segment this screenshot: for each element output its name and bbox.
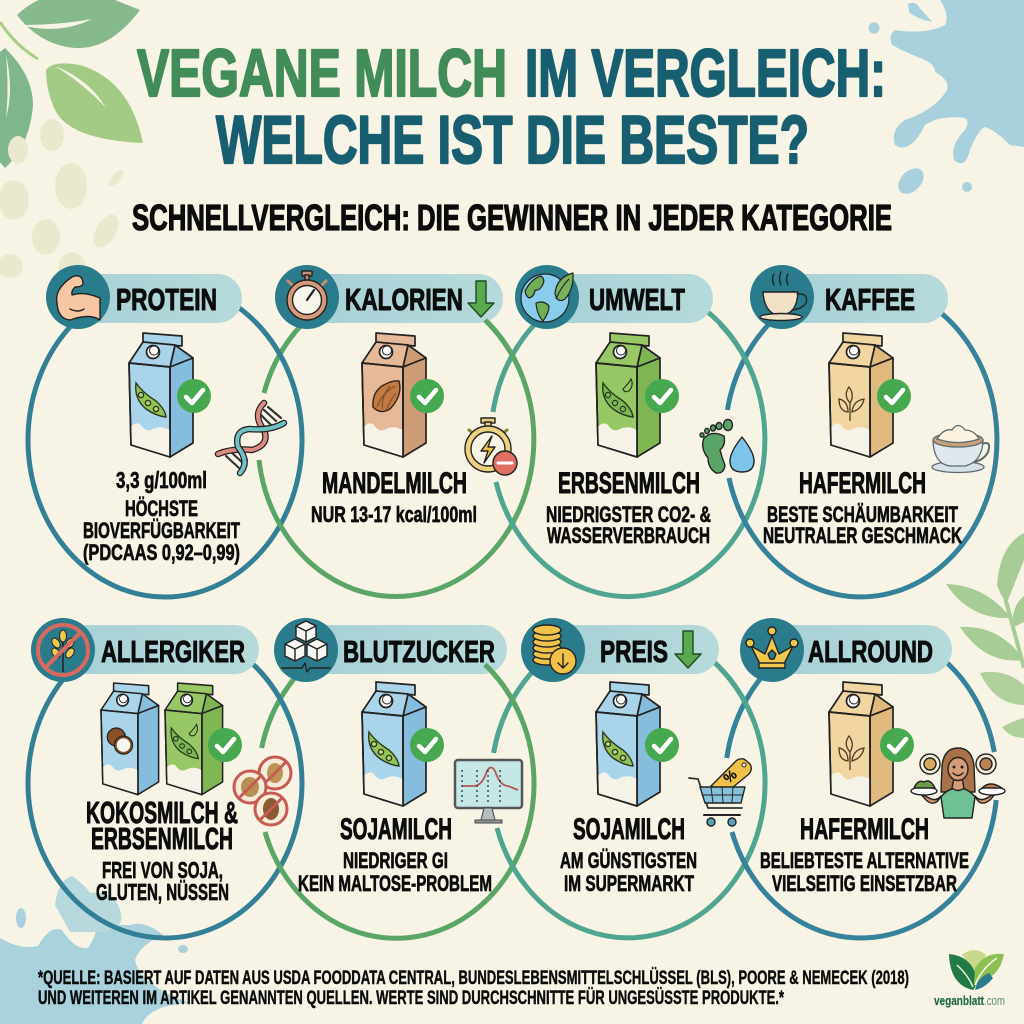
text: kalorien: NUR 13-17 kcal/100ml	[311, 502, 477, 527]
text: blutzucker: KEIN MALTOSE-PROBLEM	[298, 871, 492, 896]
text: protein: 3,3 g/100ml	[116, 467, 207, 493]
header pill: kalorien	[275, 265, 503, 329]
header pill: preis: PREIS	[600, 634, 668, 669]
check badge	[645, 728, 679, 762]
text: kaffee: HAFERMILCH	[799, 467, 926, 500]
header pill: protein	[46, 265, 242, 329]
panel: preis	[485, 618, 765, 938]
check badge	[880, 728, 914, 762]
pea milk carton	[165, 683, 223, 795]
header pill: blutzucker	[274, 618, 507, 682]
icon: crossed-out nuts	[233, 756, 292, 826]
text: preis	[560, 813, 697, 896]
soy milk carton	[596, 682, 660, 806]
panel: umwelt	[485, 265, 765, 596]
text: allround: HAFERMILCH	[800, 813, 929, 846]
decoration: bottom-left milk splash	[0, 876, 190, 1024]
text: preis: AM GÜNSTIGSTEN	[560, 848, 697, 873]
header pill: umwelt	[515, 265, 713, 329]
text: protein: BIOVERFÜGBARKEIT	[83, 518, 240, 543]
icon: arrow down	[468, 281, 494, 317]
footer source note	[38, 968, 909, 1009]
text: kaffee	[763, 467, 962, 548]
soy milk carton	[362, 682, 426, 806]
panel: allround	[720, 618, 1005, 938]
text: blutzucker: SOJAMILCH	[340, 813, 452, 846]
text: blutzucker	[298, 813, 492, 896]
header pill: kalorien: KALORIEN	[345, 282, 463, 317]
panel: protein	[28, 265, 302, 597]
check badge	[645, 379, 679, 413]
logo: veganblatt	[934, 950, 1005, 1008]
text: allround	[760, 813, 969, 896]
title	[137, 36, 886, 178]
text: umwelt	[546, 467, 711, 548]
decoration: top-left leaves	[0, 0, 143, 168]
text: allergiker	[86, 795, 238, 905]
panel: kalorien	[255, 265, 534, 596]
logo: veganblatt: veganblatt	[934, 993, 985, 1008]
icon: glucose monitor	[455, 760, 522, 823]
text: kalorien	[311, 467, 477, 527]
text: blutzucker: NIEDRIGER GI	[343, 848, 448, 873]
icon: DNA helix	[218, 403, 284, 473]
header pill: kaffee	[750, 265, 948, 329]
icon: person with plates	[911, 748, 1005, 818]
title: IM VERGLEICH:	[525, 36, 886, 111]
icon: energy stopwatch	[465, 418, 517, 475]
text: allergiker: KOKOSMILCH &	[86, 795, 238, 830]
logo: veganblatt: .com	[984, 993, 1005, 1008]
text: kalorien: MANDELMILCH	[322, 467, 467, 500]
header pill: allergiker	[31, 618, 259, 682]
text: protein	[83, 467, 240, 565]
text: protein: (PDCAAS 0,92–0,99)	[83, 540, 240, 565]
oat milk carton	[829, 682, 893, 806]
check badge	[208, 728, 242, 762]
check badge	[410, 728, 444, 762]
header pill: protein: PROTEIN	[116, 282, 217, 317]
icon: shopping cart with tag: %	[720, 766, 740, 786]
decoration: right leaves	[946, 533, 1024, 738]
header pill: blutzucker: BLUTZUCKER	[343, 634, 495, 669]
text: preis: SOJAMILCH	[573, 813, 685, 846]
text: allergiker: GLUTEN, NÜSSEN	[96, 879, 229, 905]
icon: shopping cart with tag	[689, 759, 751, 826]
text: allergiker: ERBSENMILCH	[91, 821, 233, 856]
text: protein: HÖCHSTE	[125, 496, 198, 521]
decoration: pale seed blobs	[0, 119, 125, 288]
header pill: allround: ALLROUND	[808, 634, 933, 669]
title: VEGANE MILCH	[137, 36, 507, 111]
text: umwelt: NIEDRIGSTER CO2- &	[546, 502, 711, 527]
text: umwelt: ERBSENMILCH	[558, 467, 700, 500]
check badge	[877, 379, 911, 413]
text: preis: IM SUPERMARKT	[564, 871, 694, 896]
header pill: allround	[740, 618, 952, 682]
text: umwelt: WASSERVERBRAUCH	[547, 523, 710, 548]
header pill: allergiker: ALLERGIKER	[101, 634, 245, 669]
pea milk carton	[596, 333, 660, 457]
panel: allergiker	[28, 618, 302, 938]
check badge	[410, 379, 444, 413]
check badge	[177, 379, 211, 413]
icon: footprint and water drop	[700, 420, 754, 473]
coconut milk carton	[101, 683, 159, 795]
header pill: umwelt: UMWELT	[589, 282, 685, 317]
panel: kaffee	[720, 265, 997, 597]
icon: cappuccino	[932, 426, 989, 472]
decoration: top-right milk splash	[868, 0, 1024, 199]
header pill: preis	[521, 618, 719, 682]
panel: blutzucker	[255, 618, 534, 938]
text: allergiker: FREI VON SOJA,	[102, 857, 223, 883]
soy milk carton	[129, 333, 193, 457]
almond milk carton	[362, 333, 426, 457]
header pill: kaffee: KAFFEE	[825, 282, 915, 317]
oat milk carton	[829, 333, 893, 457]
icon: arrow down	[675, 631, 701, 668]
